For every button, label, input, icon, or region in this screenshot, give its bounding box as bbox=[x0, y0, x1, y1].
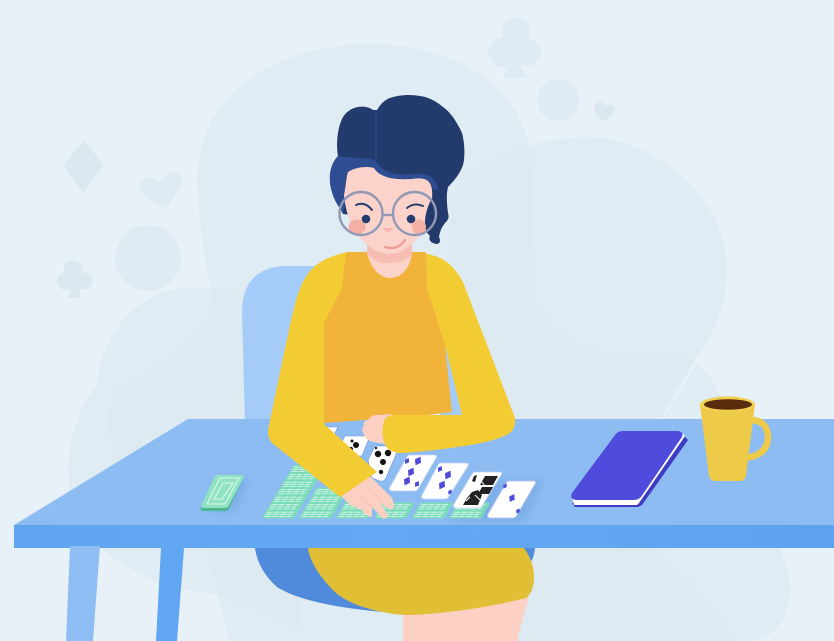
card: five of diamonds bbox=[389, 455, 437, 491]
circle top bbox=[537, 79, 579, 121]
person leg bbox=[403, 596, 529, 641]
card: two of diamonds bbox=[487, 481, 536, 518]
icon: heart top bbox=[594, 101, 615, 121]
table front bbox=[14, 525, 834, 548]
table leg left bbox=[66, 546, 100, 641]
circle left bbox=[115, 225, 181, 291]
table leg right bbox=[156, 548, 184, 641]
coffee bbox=[704, 399, 752, 410]
cheeks bbox=[348, 220, 366, 234]
right forearm cover bbox=[382, 415, 505, 453]
eyes bbox=[362, 215, 370, 223]
clubs pips 3 bbox=[375, 447, 391, 474]
card: jack of clubs bbox=[453, 472, 502, 508]
card: top clubs bbox=[312, 427, 338, 445]
clubs pips 2 bbox=[349, 440, 359, 451]
head bbox=[330, 95, 464, 254]
chair seat bbox=[255, 548, 535, 612]
face bbox=[344, 167, 432, 254]
chair gap bbox=[440, 330, 470, 420]
right sleeve bbox=[382, 253, 515, 453]
far hand bbox=[362, 414, 392, 445]
notebook bbox=[571, 431, 688, 507]
icon: club top bbox=[488, 18, 541, 78]
card: clubs 3 bbox=[368, 446, 398, 481]
face up cards bbox=[312, 427, 536, 518]
hair part line bbox=[375, 110, 377, 160]
glasses bbox=[340, 192, 436, 235]
mug rim bbox=[700, 396, 755, 412]
eyebrows bbox=[356, 204, 372, 210]
card: clubs 2 bbox=[334, 436, 370, 456]
chair back bbox=[242, 266, 330, 425]
neck shadow bbox=[367, 240, 412, 263]
card shadows bbox=[210, 478, 545, 522]
icon: diamond left bbox=[64, 142, 103, 192]
hair wave highlight bbox=[330, 156, 438, 214]
skirt bbox=[308, 548, 534, 615]
mug body bbox=[700, 404, 755, 481]
table top bbox=[14, 419, 834, 525]
hair side lock bbox=[425, 190, 442, 236]
icon: heart left bbox=[140, 172, 182, 208]
coffee mug bbox=[700, 396, 768, 481]
card columns, face down bbox=[263, 465, 489, 518]
single card deck bbox=[201, 475, 244, 511]
hair bbox=[330, 95, 464, 244]
mug handle bbox=[746, 420, 768, 458]
neck bbox=[367, 238, 412, 278]
vest bbox=[324, 252, 452, 423]
icon: club left bbox=[57, 260, 92, 298]
nose bbox=[383, 228, 393, 232]
card: three of diamonds bbox=[421, 463, 468, 499]
left sleeve bbox=[268, 252, 377, 497]
smile bbox=[385, 240, 405, 248]
near hand bbox=[340, 476, 394, 519]
